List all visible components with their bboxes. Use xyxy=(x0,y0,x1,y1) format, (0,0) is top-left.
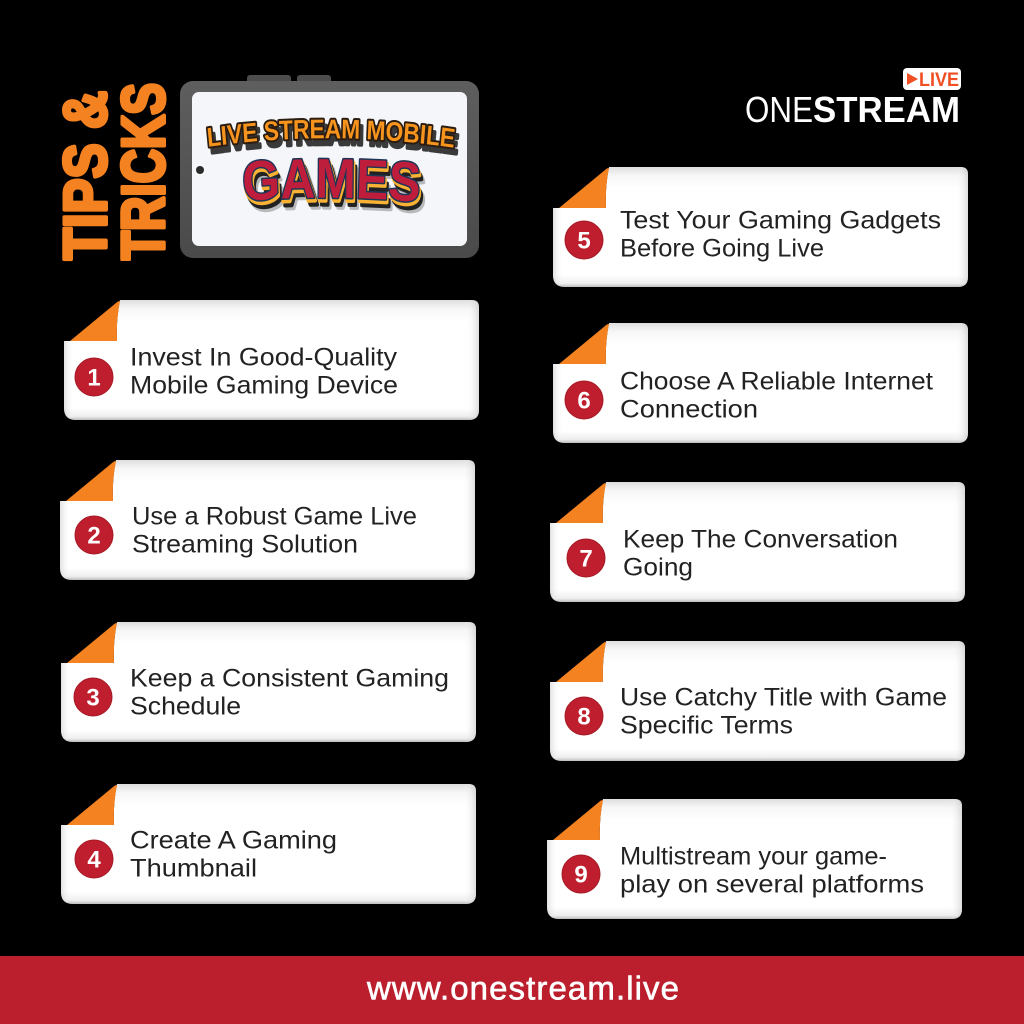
game title artwork: live stream mobile: LIVE STREAM MOBILE xyxy=(206,118,456,150)
card 8: Use Catchy Title with Game xyxy=(620,684,947,712)
card 9: Multistream your game- xyxy=(620,842,887,870)
card 5: Before Going Live xyxy=(620,234,824,262)
card 6: Choose A Reliable Internet xyxy=(620,368,933,396)
heading: tips and tricks: TRICKS xyxy=(110,83,177,260)
icon: tablet with game title xyxy=(180,75,479,258)
card 1: Mobile Gaming Device xyxy=(130,372,398,400)
card 2 xyxy=(60,460,475,580)
card 7: Going xyxy=(623,554,693,582)
game title artwork: games: GAMES xyxy=(243,158,420,203)
card 2: 2 xyxy=(87,522,101,550)
card 5: 5 xyxy=(577,228,591,254)
card 2: Use a Robust Game Live xyxy=(132,502,417,530)
logo: onestream live xyxy=(745,68,961,130)
game title artwork: live stream mobile: LIVE STREAM MOBILE xyxy=(210,124,460,156)
game title artwork: games: GAMES xyxy=(250,167,426,214)
card 9 xyxy=(547,799,962,919)
card 4: 4 xyxy=(87,846,101,874)
game title artwork: games: GAMES xyxy=(244,160,422,206)
card 7: Keep The Conversation xyxy=(623,526,898,554)
footer bar with website xyxy=(0,956,1024,1024)
card 4: Create A Gaming xyxy=(130,826,337,854)
card 9: 9 xyxy=(574,862,588,888)
card 3: Schedule xyxy=(130,692,241,720)
card 8: 8 xyxy=(577,704,591,730)
heading: tips and tricks xyxy=(52,83,177,260)
card 3: 3 xyxy=(86,684,100,712)
card 6: Connection xyxy=(620,396,758,424)
footer bar with website: www.onestream.live xyxy=(366,970,679,1006)
card 2: Streaming Solution xyxy=(132,530,358,558)
card 7 xyxy=(550,482,965,602)
card 1: Invest In Good-Quality xyxy=(130,344,398,372)
card 7: 7 xyxy=(579,546,593,572)
card 3 xyxy=(61,622,476,742)
logo: onestream live: STREAM xyxy=(813,89,960,130)
card 8: Specific Terms xyxy=(620,712,793,740)
card 5: Test Your Gaming Gadgets xyxy=(620,206,941,234)
card 5 xyxy=(553,167,968,287)
card 9: play on several platforms xyxy=(620,870,924,898)
game title artwork: live stream mobile: LIVE STREAM MOBILE xyxy=(208,120,455,148)
heading: tips and tricks: TIPS & xyxy=(52,91,119,260)
card 8 xyxy=(550,641,965,761)
card 3: Keep a Consistent Gaming xyxy=(130,664,449,692)
card 1 xyxy=(64,300,479,420)
card 6 xyxy=(553,323,968,443)
card 6: 6 xyxy=(577,388,591,414)
game title artwork: games: GAMES xyxy=(247,164,424,210)
card 4 xyxy=(61,784,476,904)
card 1: 1 xyxy=(87,364,101,392)
logo: onestream live: ONE xyxy=(745,89,813,130)
logo: onestream live: LIVE xyxy=(919,70,959,91)
card 4: Thumbnail xyxy=(130,854,257,882)
